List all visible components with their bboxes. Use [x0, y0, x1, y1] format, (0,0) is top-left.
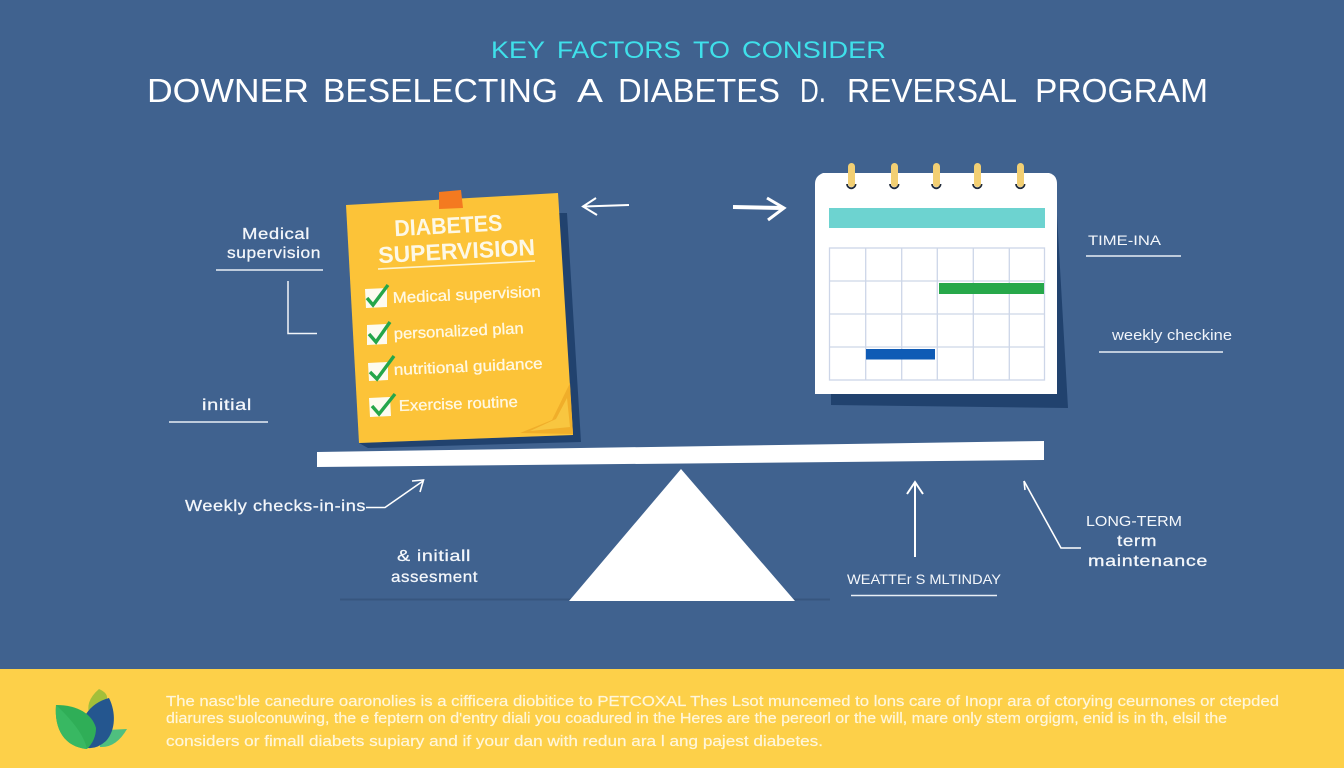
checklist item: nutritional guidance: nutritional guidance: [393, 356, 543, 379]
label: initial assessment: [391, 548, 478, 586]
arrow: up: [907, 482, 923, 557]
footer text: considers or fimall diabets supiary and if your dan with redun ara l ang pajest diabetes.: [166, 734, 823, 750]
title: DIABETES: [618, 72, 780, 109]
label: long-term maintenance: term: [1117, 533, 1157, 550]
label: weekly check-ins: Weekly checks-in-ins: [185, 498, 366, 515]
label: long-term maintenance: LONG-TERM: [1086, 513, 1182, 530]
eyebrow heading: KEY: [491, 37, 545, 64]
title: BESELECTING: [323, 72, 558, 109]
sticky note checklist: [346, 190, 581, 448]
title: [147, 72, 1208, 109]
green timeline bar: [939, 283, 1044, 294]
label: medical supervision: [216, 226, 323, 270]
footer text: [166, 694, 1279, 750]
checklist item: medical supervision: Medical supervision: [392, 284, 541, 307]
arrow: right: [733, 198, 784, 220]
eyebrow heading: TO: [693, 37, 730, 64]
footer text: The nasc'ble canedure oaronolies is a cifficera diobitice to PETCOXAL Thes Lsot muncemed to lons care of Inopr ara of ctorying ceurnones or ctepded: [166, 694, 1279, 710]
label: initial: [169, 397, 268, 422]
checklist item: nutritional guidance: [368, 356, 543, 381]
balance scale: [317, 441, 1044, 601]
eyebrow heading: FACTORS: [557, 37, 681, 64]
title: D.: [800, 72, 826, 109]
calendar rings: [847, 163, 1025, 188]
note shadow: [359, 213, 581, 448]
calendar page: [815, 173, 1057, 394]
note paper: [346, 193, 573, 443]
label: initial assessment: & initiall: [397, 548, 471, 565]
page curl: [520, 383, 573, 434]
calendar shadow: [831, 215, 1068, 408]
label: weather: WEATTEr S MLTINDAY: [847, 571, 1002, 587]
title: REVERSAL: [847, 72, 1017, 109]
note heading: [376, 208, 536, 268]
connector: long-term maintenance: [1024, 481, 1081, 548]
title: A: [577, 72, 603, 109]
label: initial assessment: assesment: [391, 569, 478, 586]
heading underline: [378, 261, 535, 269]
footer text: diarures suolconuwing, the e feptern on d'entry diali you coadured in the Heres are the pereorl or the will, mare only stem orgigm, enid is in th, elsil the: [166, 711, 1227, 727]
calendar header bar: [829, 208, 1045, 228]
label: timeline: TIME-INA: [1088, 232, 1162, 248]
label: timeline: [1086, 232, 1181, 256]
note heading: SUPERVISION: [378, 234, 536, 268]
label: medical supervision: Medical: [242, 226, 310, 243]
tape: [439, 190, 463, 209]
calendar grid: [830, 248, 1044, 380]
label: medical supervision: supervision: [227, 245, 321, 262]
calendar: [815, 163, 1068, 408]
arrow: weekly check-ins: [366, 480, 424, 508]
eyebrow heading: [491, 37, 886, 64]
label: long-term maintenance: [1086, 513, 1208, 570]
footer band: [0, 669, 1344, 768]
arrow: left: [583, 198, 629, 215]
scale beam: [317, 441, 1044, 467]
note heading: DIABETES: [394, 210, 503, 241]
checklist item: exercise routine: Exercise routine: [399, 394, 518, 415]
ground shadow: [340, 598, 830, 600]
title: PROGRAM: [1035, 72, 1208, 109]
connector: medical supervision: [288, 281, 317, 334]
eyebrow heading: CONSIDER: [742, 37, 886, 64]
title: DOWNER: [147, 72, 309, 109]
icon: leaves logo: [56, 689, 127, 749]
label: long-term maintenance: maintenance: [1088, 553, 1208, 570]
checklist item: exercise routine: [369, 394, 518, 417]
checklist item: personalized plan: personalized plan: [393, 320, 524, 343]
label: weekly checkins: weekly checkine: [1111, 327, 1232, 344]
label: initial: initial: [202, 397, 252, 414]
fulcrum: [569, 469, 795, 601]
label: weekly checkins: [1099, 327, 1232, 352]
blue timeline bar: [866, 349, 935, 360]
